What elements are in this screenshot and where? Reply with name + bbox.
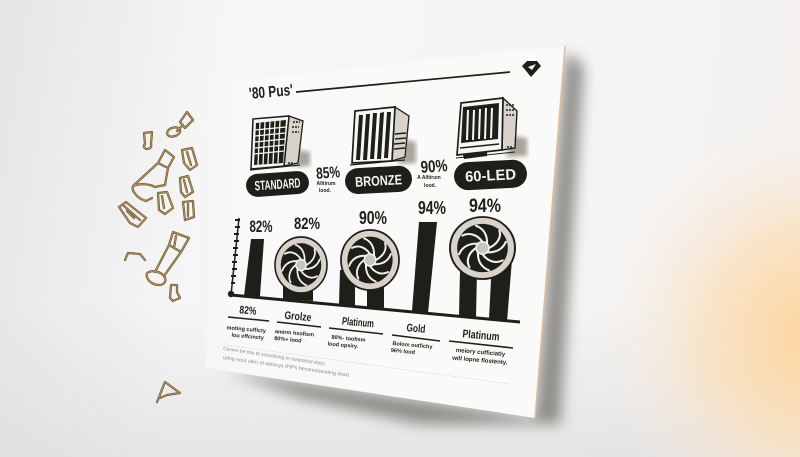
bar percentages: 94% xyxy=(418,198,446,218)
column labels xyxy=(226,303,513,366)
label: Grolze: amirm hsofism xyxy=(275,329,314,338)
label: 82%: lou effcincty xyxy=(231,333,265,342)
icon: standard power supply xyxy=(250,116,310,170)
chart axis xyxy=(231,218,520,322)
label: Gold: Bolom outfichy xyxy=(392,341,434,351)
label: Platinum right: will lopne flostenty. xyxy=(451,356,508,366)
stat: 85%: 85% xyxy=(316,164,341,183)
label: Platinum: 80%- toofism xyxy=(331,335,366,344)
badge: STANDARD: STANDARD xyxy=(254,175,301,194)
heading: '80 Pus' xyxy=(248,82,294,103)
heading xyxy=(248,72,510,103)
label: Platinum: Platinum xyxy=(341,316,375,330)
icon: logo diamond xyxy=(522,61,541,77)
label: Gold xyxy=(391,321,435,358)
label: Platinum right: meiory cufficiatly xyxy=(456,348,506,358)
stat: 85% xyxy=(316,164,341,194)
stat: 90%: 90% xyxy=(420,156,448,177)
footnote: Cexmn be this bt soscatsing or ouspobod dstry- xyxy=(223,346,327,367)
label: 82%: moting cufficty xyxy=(226,325,267,335)
bar percentages: 82% xyxy=(250,217,272,236)
label: Platinum right: Platinum xyxy=(462,328,500,344)
stat: 90% xyxy=(417,156,448,189)
icon: fan 1 xyxy=(275,237,327,293)
stat: 90%: lood. xyxy=(424,183,437,189)
label: 82% xyxy=(226,303,269,342)
bar percentages: 94% xyxy=(469,196,501,217)
bar percentages xyxy=(250,196,501,236)
bar percentages: 90% xyxy=(359,208,387,228)
bar percentages: 82% xyxy=(294,214,320,233)
label: Platinum xyxy=(327,315,375,351)
panel: Bronze unit xyxy=(344,107,416,195)
bars xyxy=(244,222,512,321)
label: Grolze xyxy=(274,309,316,345)
icon: bronze power supply xyxy=(350,107,416,165)
metal clips xyxy=(119,112,197,402)
label: Platinum: lood opsiry. xyxy=(327,341,359,350)
badge: 60-LED: 60-LED xyxy=(465,166,517,186)
stat: 90%: A Alltirum xyxy=(417,175,441,181)
panel: Standard unit xyxy=(245,116,310,198)
footnote xyxy=(223,346,350,379)
paper shadow xyxy=(226,52,584,424)
clip outlines xyxy=(119,112,197,402)
paper edge xyxy=(535,46,565,418)
icon: fan 2 xyxy=(341,230,399,290)
stat: 85%: Alltirum xyxy=(317,181,336,187)
stat: 85%: lood. xyxy=(319,188,332,194)
axis origin dot xyxy=(228,291,234,297)
label: Gold: Gold xyxy=(406,322,426,336)
label: 82%: 82% xyxy=(239,304,257,318)
label: Platinum right xyxy=(451,328,510,366)
panel: 60-LED unit xyxy=(453,98,528,191)
footnote: uting nout ulen ot aelonys tFtPs becsmatansting dosd xyxy=(223,355,350,379)
label: Grolze: 80%+ lood xyxy=(274,336,302,344)
clip highlights xyxy=(119,112,197,402)
label: Gold: 96% lood xyxy=(391,348,415,356)
label: Grolze: Grolze xyxy=(284,310,312,324)
badge: BRONZE: BRONZE xyxy=(355,171,402,190)
icon: 60-LED power supply xyxy=(456,98,527,159)
chart: efficiency bars and fans xyxy=(228,196,520,322)
paper sheet xyxy=(205,46,565,418)
icon: fan 3 xyxy=(450,217,515,279)
